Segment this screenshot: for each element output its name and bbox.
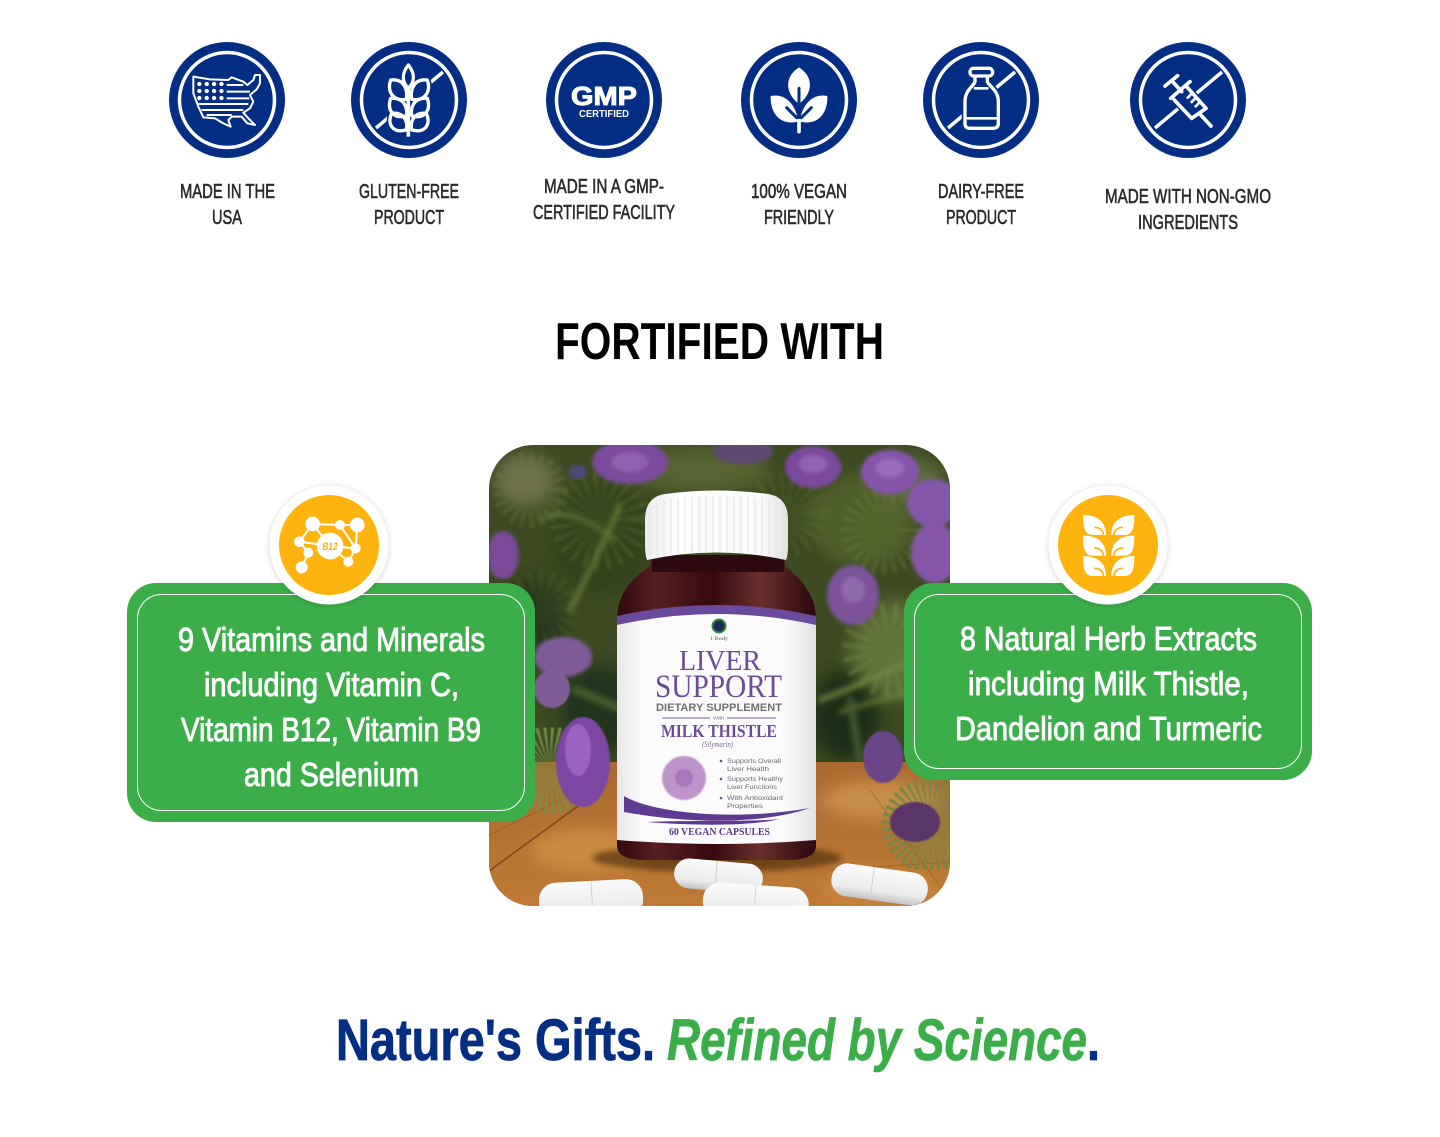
tagline: Nature's Gifts.	[336, 1008, 655, 1073]
icon: syringe	[1165, 76, 1211, 126]
label: MILK THISTLE	[661, 721, 777, 741]
icon: B12 molecule badge: B12	[322, 541, 338, 553]
label: vegan: FRIENDLY	[764, 207, 834, 229]
bottle cap	[645, 490, 788, 560]
label: made in the USA: USA	[212, 207, 242, 229]
badge: GMP certified: GMP	[571, 81, 637, 111]
card: natural herb extracts: including Milk Thistle,	[968, 665, 1249, 702]
label: SUPPORT	[655, 669, 782, 705]
foliage texture	[511, 471, 914, 674]
badge: GMP certified: CERTIFIED	[579, 109, 629, 120]
foreground thistles	[528, 670, 954, 849]
label: 1 Body	[710, 636, 728, 642]
card: vitamins and minerals: Vitamin B12, Vitamin B9	[181, 711, 481, 748]
benefit bullets: Properties	[727, 803, 764, 810]
badge: made in the USA	[169, 42, 285, 158]
label: gluten-free	[359, 181, 459, 229]
product photo	[487, 440, 959, 925]
label: made in the USA	[180, 181, 275, 229]
badge: dairy-free	[923, 42, 1039, 158]
card: vitamins and minerals: including Vitamin C,	[204, 666, 459, 703]
tagline: .	[1087, 1008, 1100, 1073]
card: natural herb extracts: Dandelion and Turmeric	[955, 710, 1262, 747]
label: made in the USA: MADE IN THE	[180, 181, 275, 203]
label: vegan	[751, 181, 847, 229]
label: LIVER	[679, 646, 761, 677]
label: (Silymarin)	[702, 740, 733, 749]
label	[617, 605, 816, 844]
label: vegan: 100% VEGAN	[751, 181, 847, 203]
benefit bullets: Liver Health	[727, 766, 769, 773]
label: GMP facility: MADE IN A GMP-	[544, 176, 664, 198]
card: natural herb extracts: 8 Natural Herb Extracts	[960, 620, 1257, 657]
benefit bullets: Liver Functions	[727, 784, 778, 791]
icon: milk bottle	[965, 68, 998, 128]
label: dairy-free: PRODUCT	[946, 207, 1016, 229]
card: vitamins and minerals	[127, 583, 535, 822]
badge: GMP certified	[546, 42, 662, 158]
icon: wheat	[390, 65, 428, 137]
label: non-GMO: INGREDIENTS	[1138, 212, 1238, 234]
tagline: Refined by Science	[667, 1008, 1087, 1073]
card: vitamins and minerals: 9 Vitamins and Minerals	[178, 621, 485, 658]
benefit bullets: With Antioxidant	[727, 795, 783, 802]
label: gluten-free: GLUTEN-FREE	[359, 181, 459, 203]
label: GMP facility: CERTIFIED FACILITY	[533, 202, 675, 224]
benefit bullets: Supports Overall	[727, 758, 782, 765]
label: dairy-free: DAIRY-FREE	[938, 181, 1024, 203]
heading: fortified with: FORTIFIED WITH	[555, 313, 884, 371]
label: With	[713, 716, 725, 720]
icon: USA flag map	[193, 75, 260, 127]
thistle on label	[662, 756, 706, 800]
benefit bullets: Supports Healthy	[727, 776, 784, 783]
icon row with labels	[169, 42, 1271, 234]
label: GMP facility	[533, 176, 675, 224]
label: DIETARY SUPPLEMENT	[656, 702, 782, 714]
label: 60 VEGAN CAPSULES	[669, 827, 770, 838]
card: vitamins and minerals: and Selenium	[244, 756, 419, 793]
background thistles	[487, 440, 959, 677]
label: dairy-free	[938, 181, 1024, 229]
label: gluten-free: PRODUCT	[374, 207, 444, 229]
badge: gluten-free	[351, 42, 467, 158]
benefit bullets	[721, 758, 784, 810]
icon: herb leaves badge	[1048, 486, 1168, 604]
card: natural herb extracts	[904, 583, 1312, 780]
tagline	[336, 1008, 1100, 1073]
icon: B12 molecule badge	[270, 486, 388, 604]
supplement bottle	[617, 490, 816, 860]
capsules	[539, 858, 928, 906]
label: non-GMO	[1105, 186, 1271, 234]
icon: leaves	[771, 67, 827, 132]
label: non-GMO: MADE WITH NON-GMO	[1105, 186, 1271, 208]
badge: non-GMO	[1130, 42, 1246, 158]
badge: vegan	[741, 42, 857, 158]
wooden table planks	[489, 780, 950, 910]
